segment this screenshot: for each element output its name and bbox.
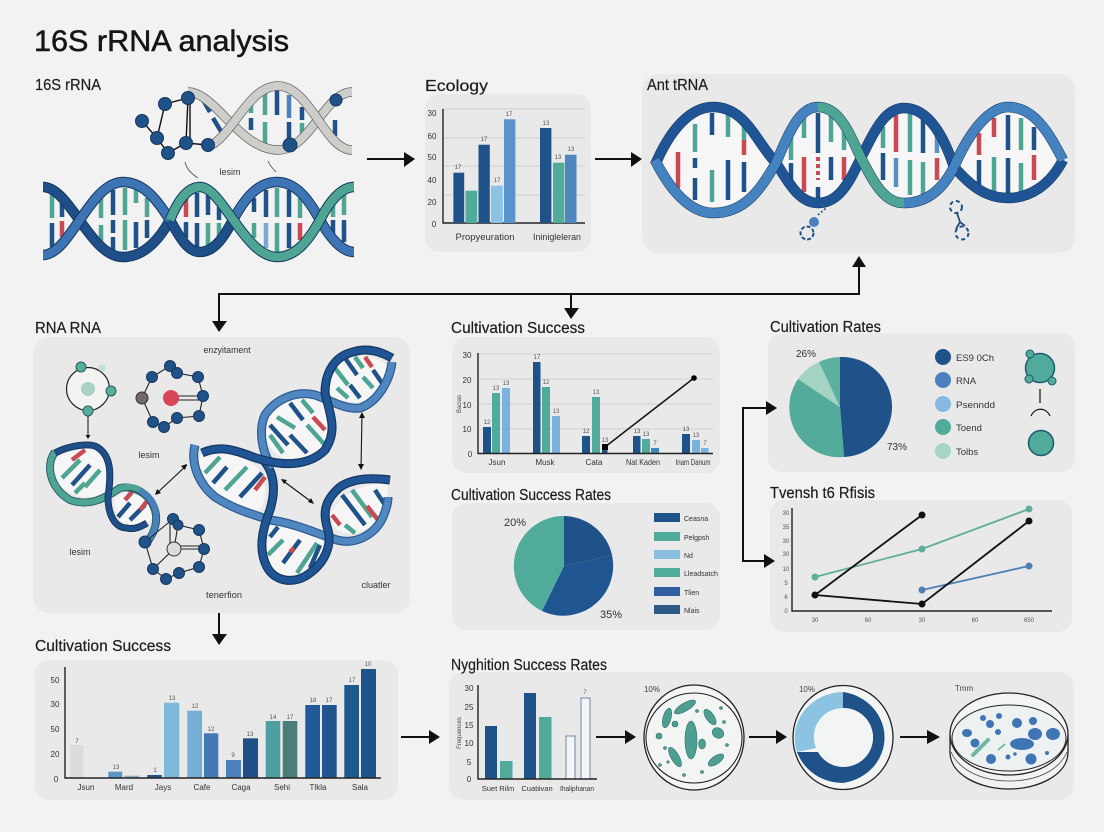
grouped bar chart with line: 17	[534, 355, 541, 361]
grouped bar chart with line: 13	[683, 427, 690, 433]
bar chart: 17	[287, 715, 294, 721]
bar chart: Tlkla	[310, 783, 327, 792]
bar chart: 0	[467, 775, 472, 784]
labels: enzyitament	[204, 345, 251, 355]
bar chart: 50	[51, 725, 60, 734]
grouped bar chart with line: 7	[703, 441, 707, 447]
bar chart: Suet Rilm	[482, 784, 514, 793]
grouped bar chart with line: 13	[602, 438, 609, 444]
arrow: ecology to tRNA	[595, 152, 642, 167]
icon: open petri dish with blue colonies: Tmm	[955, 684, 973, 693]
icon: open petri dish with blue colonies	[950, 684, 1068, 789]
bar chart: ecology: 50	[428, 153, 437, 162]
gray helix with rungs	[188, 86, 352, 150]
bar chart: 9	[231, 753, 235, 759]
bar chart: ecology: 60	[428, 132, 437, 141]
bar chart: Jays	[155, 783, 171, 792]
panel background	[35, 660, 398, 800]
bar chart: 5	[467, 758, 472, 767]
line chart	[783, 506, 1052, 624]
bar chart: Sala	[352, 783, 369, 792]
panel background	[425, 94, 591, 252]
bar chart: ecology: 13	[555, 155, 562, 161]
panel: Ecology	[425, 78, 591, 252]
bar chart: ecology: Ininigleleran	[533, 232, 581, 242]
icon: ring molecule with gray atom	[139, 514, 210, 584]
grouped bar chart with line: 10	[463, 425, 472, 434]
grouped bar chart with line: 12	[543, 380, 550, 386]
bar chart: Mard	[115, 783, 133, 792]
line chart: 60	[972, 618, 979, 624]
grouped bar chart with line: 13	[634, 429, 641, 435]
grouped bar chart with line: Jsun	[489, 458, 505, 467]
pie chart	[789, 349, 907, 457]
legend	[654, 513, 718, 615]
grouped bar chart with line: 20	[463, 376, 472, 385]
molecule chain	[136, 92, 342, 160]
bar chart: 30	[465, 684, 474, 693]
bar chart: 12	[208, 727, 215, 733]
legend: ES9 0Ch	[956, 353, 994, 364]
heading: Cultivation Success Rates: Cultivation Success Rates	[451, 487, 611, 504]
icon: petri dish with teal bacteria: 10%	[644, 685, 660, 694]
connector arrows from top row	[212, 256, 866, 332]
grouped bar chart with line: 13	[693, 433, 700, 439]
labels: lesim	[69, 547, 91, 557]
pie chart: 35%	[600, 609, 622, 621]
arrow to dish	[900, 730, 940, 744]
bar chart: ecology: 20	[428, 198, 437, 207]
grouped bar chart with line	[457, 351, 713, 467]
grouped bar chart with line: 30	[463, 351, 472, 360]
bar chart: ecology: 40	[428, 176, 437, 185]
grouped bar chart with line: 12	[583, 429, 590, 435]
bar chart: 20	[51, 750, 60, 759]
line chart: 0	[784, 609, 788, 615]
panel background	[452, 337, 720, 473]
panel: Cultivation Success chart	[451, 320, 720, 473]
grouped bar chart with line: 13	[643, 432, 650, 438]
panel background	[770, 500, 1072, 632]
bar chart: ecology: 17	[481, 137, 488, 143]
line chart: 30	[783, 539, 790, 545]
icon: petri dish with teal bacteria	[644, 685, 744, 790]
line chart: 10	[783, 567, 790, 573]
panel background	[33, 337, 410, 613]
panel: 16S rRNA	[35, 77, 354, 257]
bar chart: Cafe	[194, 783, 211, 792]
bar chart: Sehi	[274, 783, 290, 792]
bar chart: 18	[310, 698, 317, 704]
heading: Cultivation Success: Cultivation Success	[35, 638, 171, 655]
panel: Cultivation Success Rates pie	[451, 487, 720, 630]
legend: Nd	[684, 553, 693, 560]
panel: bottom right sequence	[449, 657, 1074, 800]
bar chart: Frequences	[457, 717, 463, 749]
grouped bar chart with line: Musk	[535, 458, 556, 467]
line chart: 60	[865, 618, 872, 624]
grouped bar chart with line: Bacias	[457, 395, 463, 413]
legend: Toend	[956, 423, 982, 434]
bar chart: ecology	[428, 109, 585, 242]
bar chart: Caga	[231, 783, 251, 792]
icon: donut chart in dish	[793, 685, 893, 790]
bar chart: ecology: 0	[432, 220, 437, 229]
legend: Psenndd	[956, 400, 995, 411]
elbow arrows to right panels	[743, 401, 777, 568]
icon: ring molecule with red atom	[136, 360, 208, 432]
heading: Cultivation Success: Cultivation Success	[451, 320, 585, 337]
grouped bar chart with line: 10	[463, 401, 472, 410]
line chart: 5	[784, 581, 788, 587]
grouped bar chart with line: 13	[553, 409, 560, 415]
legend: Pelgpsh	[684, 535, 709, 542]
bar chart: 10	[465, 739, 474, 748]
line chart: 650	[1024, 618, 1035, 624]
bar chart: ecology: 17	[455, 165, 462, 171]
double arrows	[155, 412, 365, 504]
line chart: 30	[783, 552, 790, 558]
bar chart	[457, 684, 597, 793]
heading: Ecology: Ecology	[425, 78, 488, 95]
legend: RNA	[956, 376, 977, 387]
blue and green helix	[43, 182, 354, 257]
panel background	[452, 503, 720, 630]
heading: Cultivation Rates: Cultivation Rates	[770, 319, 881, 336]
bar chart: Cuatiivan	[521, 784, 553, 793]
icons: cells	[1025, 350, 1056, 456]
bar chart: 7	[583, 690, 587, 696]
labels: lesim	[138, 450, 160, 460]
grouped bar chart with line: 12	[484, 420, 491, 426]
heading: RNA RNA: RNA RNA	[35, 320, 102, 337]
icon: donut chart in dish: 10%	[799, 685, 815, 694]
icon: ring with teal nodes	[66, 362, 116, 439]
arrow: bottom chart to bottom right panel	[401, 730, 440, 744]
bar chart: ecology: 17	[494, 178, 501, 184]
bar chart: 1	[153, 768, 157, 774]
labels	[69, 345, 391, 600]
large helix	[655, 107, 1063, 213]
heading: Ant tRNA: Ant tRNA	[647, 77, 709, 94]
bar chart: 13	[169, 696, 176, 702]
labels: tenerfion	[206, 590, 242, 600]
panel: Cultivation Success bottom left	[35, 638, 398, 800]
arrow to donut	[749, 730, 787, 744]
grouped bar chart with line: 0	[468, 450, 473, 459]
label: lesim: lesim	[219, 167, 241, 177]
icons: small molecules	[800, 201, 968, 240]
line chart: 35	[783, 525, 790, 531]
line chart: 30	[812, 618, 819, 624]
bar chart: 7	[75, 739, 79, 745]
grouped bar chart with line: Inam Danum	[676, 458, 711, 467]
heading: 16S rRNA: 16S rRNA	[35, 77, 102, 94]
line chart: 30	[919, 618, 926, 624]
line chart: 6	[784, 595, 788, 601]
panel: Ant tRNA	[642, 74, 1075, 253]
heading: Nyghition Success Rates: Nyghition Success Rates	[451, 657, 607, 674]
pie chart: 26%	[796, 349, 816, 360]
panel: RNA RNA	[33, 320, 410, 613]
grouped bar chart with line: 13	[503, 381, 510, 387]
pie chart	[504, 516, 622, 621]
labels: cluatler	[361, 580, 391, 590]
bar chart: ecology: 13	[568, 147, 575, 153]
panel: Cultivation Rates	[768, 319, 1075, 472]
bar chart: 13	[247, 732, 254, 738]
arrow: 16S to ecology	[367, 152, 415, 167]
legend: Lleadsatch	[684, 571, 718, 578]
small green and navy helix	[50, 445, 156, 541]
large folded helix	[194, 350, 392, 580]
title: 16S rRNA analysis	[34, 25, 289, 58]
legend: Nlais	[684, 608, 700, 615]
bar chart: ecology: 13	[543, 121, 550, 127]
grouped bar chart with line: 13	[593, 390, 600, 396]
heading: trends: Tvensh t6 Rfisis	[770, 485, 875, 502]
legend: Tlien	[684, 590, 699, 597]
bar chart: 25	[465, 703, 474, 712]
bar chart: 15	[465, 721, 474, 730]
panel: Trends line chart	[770, 485, 1072, 632]
legend	[935, 349, 995, 459]
label: lesim	[185, 161, 276, 178]
bar chart: 10	[365, 662, 372, 668]
bar chart	[51, 662, 381, 792]
bar chart: 12	[192, 704, 199, 710]
panel background	[449, 672, 1074, 800]
pie chart: 73%	[887, 442, 907, 453]
panel background	[642, 74, 1075, 253]
legend: Tolbs	[956, 447, 978, 458]
bar chart: 14	[270, 715, 277, 721]
bar chart: ecology: 30	[428, 109, 437, 118]
pie chart: 20%	[504, 517, 526, 529]
bar chart: 0	[54, 775, 59, 784]
bar chart: 13	[113, 765, 120, 771]
arrow: RNA panel down	[212, 613, 227, 645]
arrow to petri dish	[596, 730, 636, 744]
line chart: 30	[783, 511, 790, 517]
grouped bar chart with line: 13	[493, 386, 500, 392]
bar chart: ecology: 17	[506, 112, 513, 118]
bar chart: 17	[326, 698, 333, 704]
bar chart: 50	[51, 676, 60, 685]
legend: Ceasna	[684, 516, 708, 523]
bar chart: Ihaliphanan	[560, 784, 594, 793]
grouped bar chart with line: Nat Kaden	[626, 458, 660, 467]
grouped bar chart with line: 7	[653, 441, 657, 447]
bar chart: ecology: Propyeuration	[456, 232, 514, 242]
panel background	[768, 333, 1075, 472]
bar chart: Jsun	[78, 783, 94, 792]
bar chart: 30	[51, 700, 60, 709]
grouped bar chart with line: Cata	[586, 458, 603, 467]
bar chart: 17	[349, 678, 356, 684]
